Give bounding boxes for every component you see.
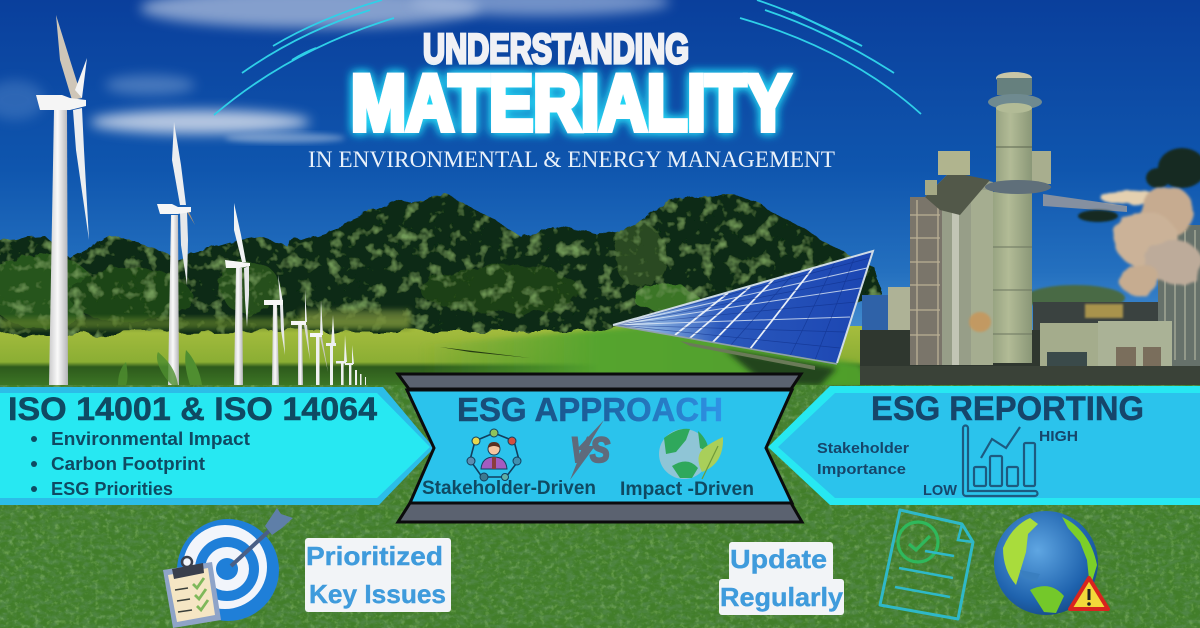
- lit base: [969, 312, 991, 332]
- panel: ESG reporting banner: [768, 386, 1200, 505]
- heading: ESG reporting: ESG REPORTING: [871, 390, 1144, 428]
- title: [308, 25, 835, 172]
- bright grass below solar array: [420, 326, 870, 388]
- low shrubs at field edge: [0, 310, 530, 358]
- bullet list: Environmental Impact: [51, 429, 250, 449]
- callout: update regularly: Update: [730, 544, 827, 574]
- stack tower: [985, 72, 1051, 363]
- heading: ISO standards: ISO 14001 & ISO 14064: [8, 391, 377, 427]
- upper boxes: [938, 151, 970, 175]
- label: stakeholder-driven: Stakeholder-Driven: [422, 478, 596, 499]
- turbine 6: [310, 300, 328, 385]
- grass foreground: [0, 385, 1200, 628]
- forest tree line: [0, 192, 880, 335]
- turbine 3: [225, 203, 250, 385]
- background: sky: [0, 0, 1200, 340]
- small side building: [888, 287, 910, 347]
- clipboard: [163, 557, 221, 628]
- bullet list: Carbon Footprint: [51, 454, 205, 474]
- turbine 2: [157, 122, 195, 385]
- small distant solar panels: [862, 295, 890, 331]
- icon: stakeholder network: [467, 429, 521, 481]
- callout: prioritized key issues: Key Issues: [309, 579, 446, 609]
- title: MATERIALITY: [351, 58, 790, 147]
- callout: prioritized key issues: Prioritized: [306, 541, 443, 571]
- right structure: [1158, 225, 1200, 370]
- bullet list: [31, 429, 250, 499]
- panel: ISO banner: [0, 387, 434, 505]
- callout: update regularly: [719, 542, 844, 615]
- stakeholder importance label: [817, 440, 909, 478]
- turbine 4: [264, 275, 285, 385]
- distant turbines: [326, 315, 366, 385]
- heading: ESG approach: ESG APPROACH: [457, 391, 723, 428]
- plant background trees: [1025, 285, 1125, 311]
- young plants in foreground: [118, 350, 202, 385]
- plant dark ground and machinery: [860, 330, 1200, 388]
- icon: earth with leaf: [659, 429, 723, 479]
- title: UNDERSTANDING: [423, 25, 689, 72]
- conveyor bridge: [1043, 194, 1127, 212]
- icon: globe with warning: [994, 511, 1108, 615]
- background: field: [0, 326, 870, 388]
- bullet list: ESG Priorities: [51, 479, 173, 499]
- tree behind smoke: [1078, 148, 1200, 222]
- stakeholder importance label: Stakeholder: [817, 440, 909, 457]
- power plant: [860, 72, 1200, 388]
- smoke plume: [1100, 187, 1200, 297]
- icon: checked document: [880, 510, 973, 619]
- clouds: [0, 0, 670, 143]
- label: impact-driven: Impact -Driven: [620, 479, 754, 500]
- main boiler building: [925, 172, 993, 365]
- callout: prioritized key issues: [305, 538, 451, 612]
- low label: LOW: [923, 482, 958, 499]
- icon: versus lightning: [570, 420, 610, 480]
- callout: update regularly: Regularly: [720, 582, 844, 612]
- title: IN ENVIRONMENTAL & ENERGY MANAGEMENT: [308, 147, 835, 172]
- icon: target with clipboard: [163, 508, 293, 628]
- title decoration arcs: [214, 0, 921, 115]
- scaffolding structure: [910, 197, 942, 365]
- turbine 1: [36, 15, 89, 385]
- stakeholder importance label: Importance: [817, 461, 906, 478]
- high label: HIGH: [1039, 428, 1078, 445]
- turbine 5: [291, 290, 310, 385]
- icon: versus lightning: VS: [570, 431, 610, 470]
- low annex buildings: [1040, 323, 1098, 366]
- solar panel array: [613, 251, 873, 386]
- panel: ESG approach ribbon: [398, 374, 802, 522]
- wind turbines: [36, 15, 366, 385]
- icon: bar chart: [963, 426, 1038, 496]
- warning triangle: [1070, 578, 1108, 609]
